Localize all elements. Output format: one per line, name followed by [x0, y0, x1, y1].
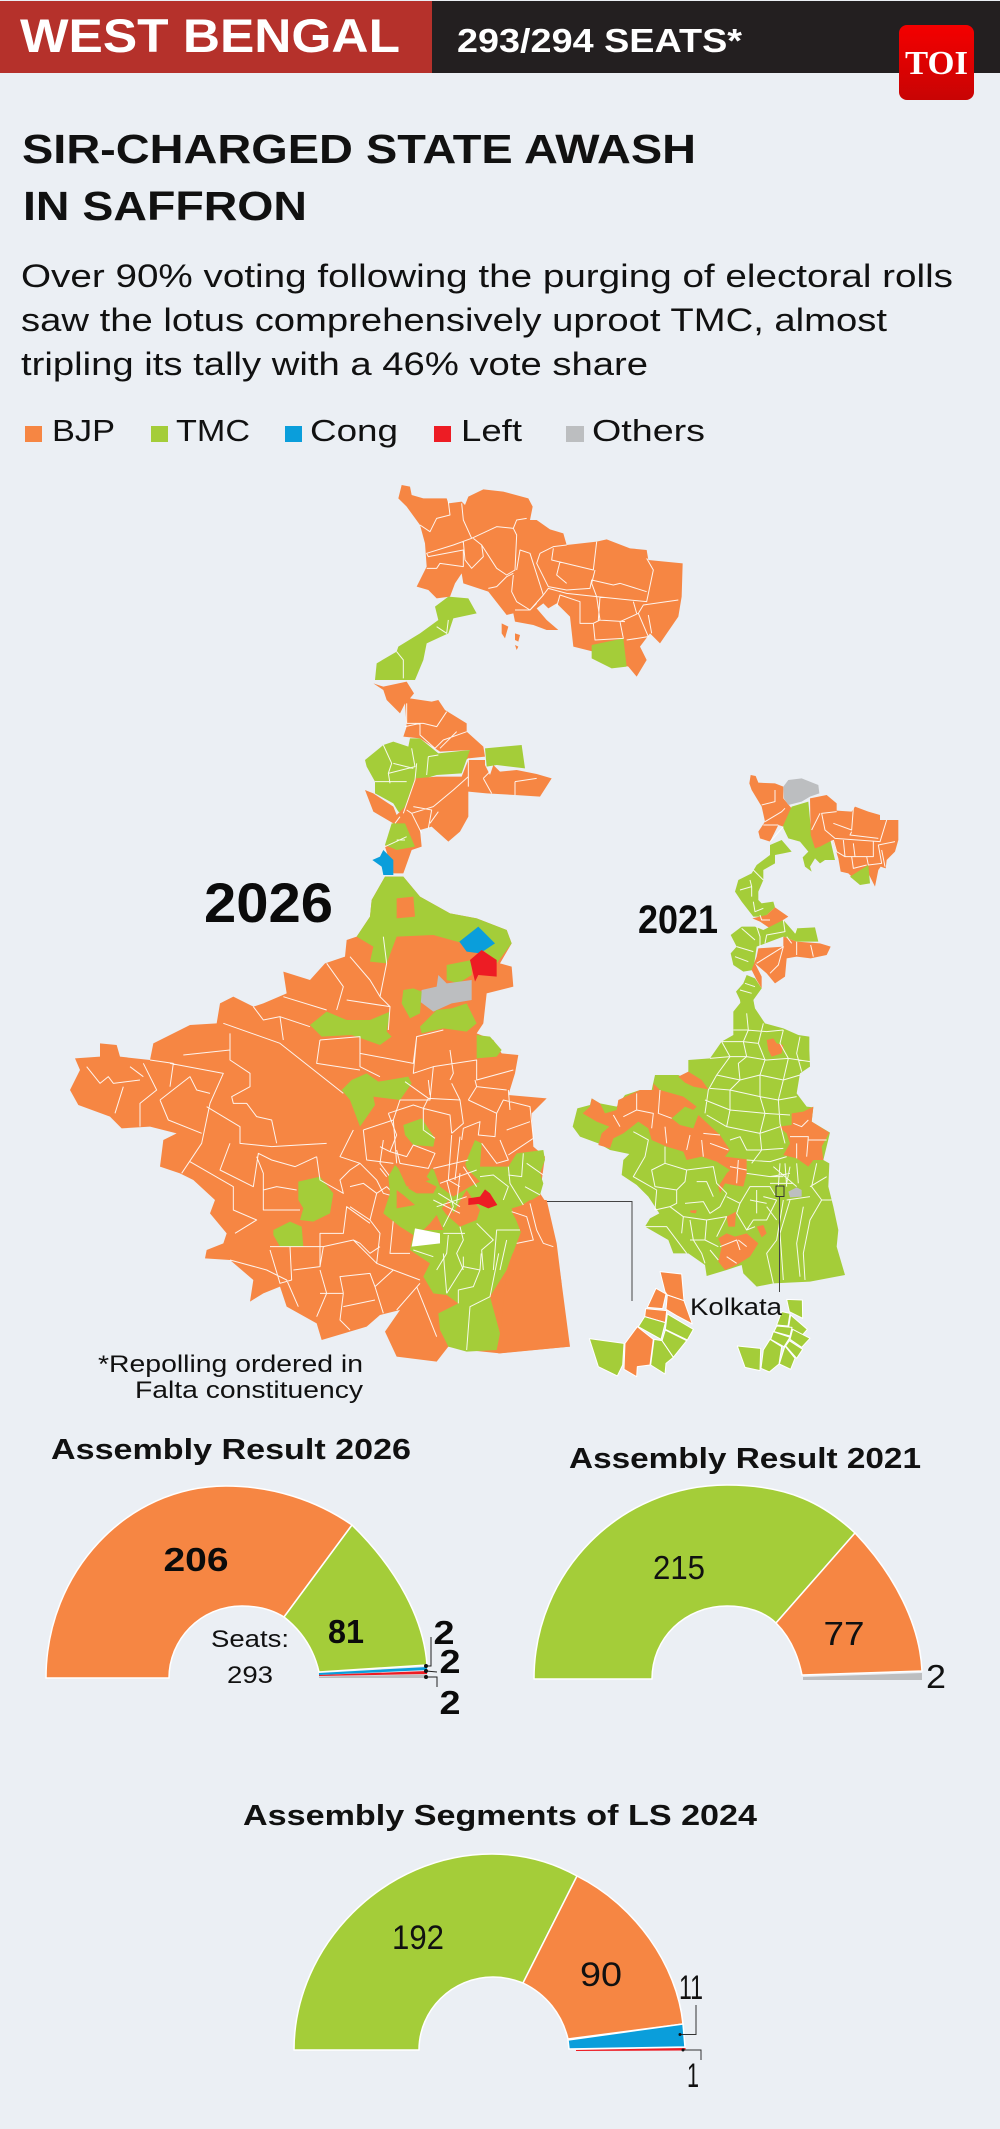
header bar	[0, 1, 1000, 73]
value labels	[392, 1919, 703, 2095]
callout line to inset	[547, 1202, 632, 1301]
Kolkata label: Kolkata	[690, 1294, 783, 1321]
value labels: 2	[440, 1643, 460, 1680]
leader lines	[680, 2005, 701, 2060]
map north 2021	[731, 775, 898, 1013]
map: 2021 results	[573, 775, 898, 1287]
legend	[25, 413, 705, 448]
map south 2021	[573, 1000, 845, 1287]
title	[22, 126, 696, 229]
year label 2026: 2026	[204, 871, 333, 934]
value labels: 192	[392, 1919, 444, 1957]
value labels: 206	[164, 1541, 228, 1578]
description text: Over 90% voting following the purging of electoral rolls	[21, 258, 953, 294]
description text: tripling its tally with a 46% vote share	[21, 346, 648, 382]
value labels: 2	[440, 1684, 460, 1721]
total seats: 293	[227, 1662, 273, 1689]
map north: Darjeeling to Malda	[365, 485, 683, 875]
value labels: 215	[653, 1549, 705, 1586]
year label 2021: 2021	[638, 898, 718, 942]
map: 2026 results	[70, 485, 683, 1362]
footnote	[98, 1351, 363, 1404]
inset: 2026 Kolkata	[589, 1272, 693, 1377]
semicircle segments	[294, 1854, 685, 2050]
footnote: Falta constituency	[135, 1377, 363, 1404]
value labels: 2	[926, 1658, 946, 1695]
icon: TOI logo: TOI	[905, 45, 968, 82]
state name: WEST BENGAL	[20, 9, 400, 62]
map south: main body	[70, 877, 570, 1362]
chart: Assembly Result 2026	[46, 1434, 460, 1721]
chart title: Assembly Result 2021	[569, 1443, 921, 1475]
chart: Assembly Result 2021	[534, 1443, 946, 1695]
icon: TOI logo	[899, 25, 974, 100]
seat count: 293/294 SEATS*	[457, 22, 742, 59]
value labels: 11	[679, 1969, 703, 2007]
chart title: Assembly Segments of LS 2024	[243, 1800, 757, 1832]
title: IN SAFFRON	[23, 183, 307, 229]
chart title: Assembly Result 2026	[51, 1434, 411, 1466]
legend: TMC	[176, 413, 250, 448]
legend: Cong	[310, 413, 398, 448]
legend: Others	[592, 413, 705, 448]
inset: 2021 Kolkata	[737, 1299, 810, 1372]
legend: Left	[461, 413, 522, 448]
semicircle segments	[534, 1485, 922, 1679]
leader lines	[426, 1637, 437, 1687]
value labels: 2	[434, 1614, 454, 1651]
value labels: 90	[580, 1956, 622, 1994]
legend: BJP	[52, 413, 115, 448]
value labels	[164, 1541, 460, 1721]
value labels: 81	[328, 1613, 364, 1650]
total seats: Seats:	[211, 1626, 289, 1653]
Kolkata marker	[776, 1186, 784, 1292]
value labels: 1	[687, 2057, 699, 2095]
description text	[21, 258, 953, 382]
value labels	[653, 1549, 946, 1695]
description text: saw the lotus comprehensively uproot TMC, almost	[21, 302, 887, 338]
title: SIR-CHARGED STATE AWASH	[22, 126, 696, 172]
chart: Assembly Segments of LS 2024	[243, 1800, 757, 2095]
map detail: Kolkata region	[380, 1080, 570, 1353]
total seats	[211, 1626, 289, 1689]
footnote: *Repolling ordered in	[98, 1351, 363, 1378]
value labels: 77	[824, 1615, 864, 1652]
semicircle segments	[46, 1486, 427, 1678]
